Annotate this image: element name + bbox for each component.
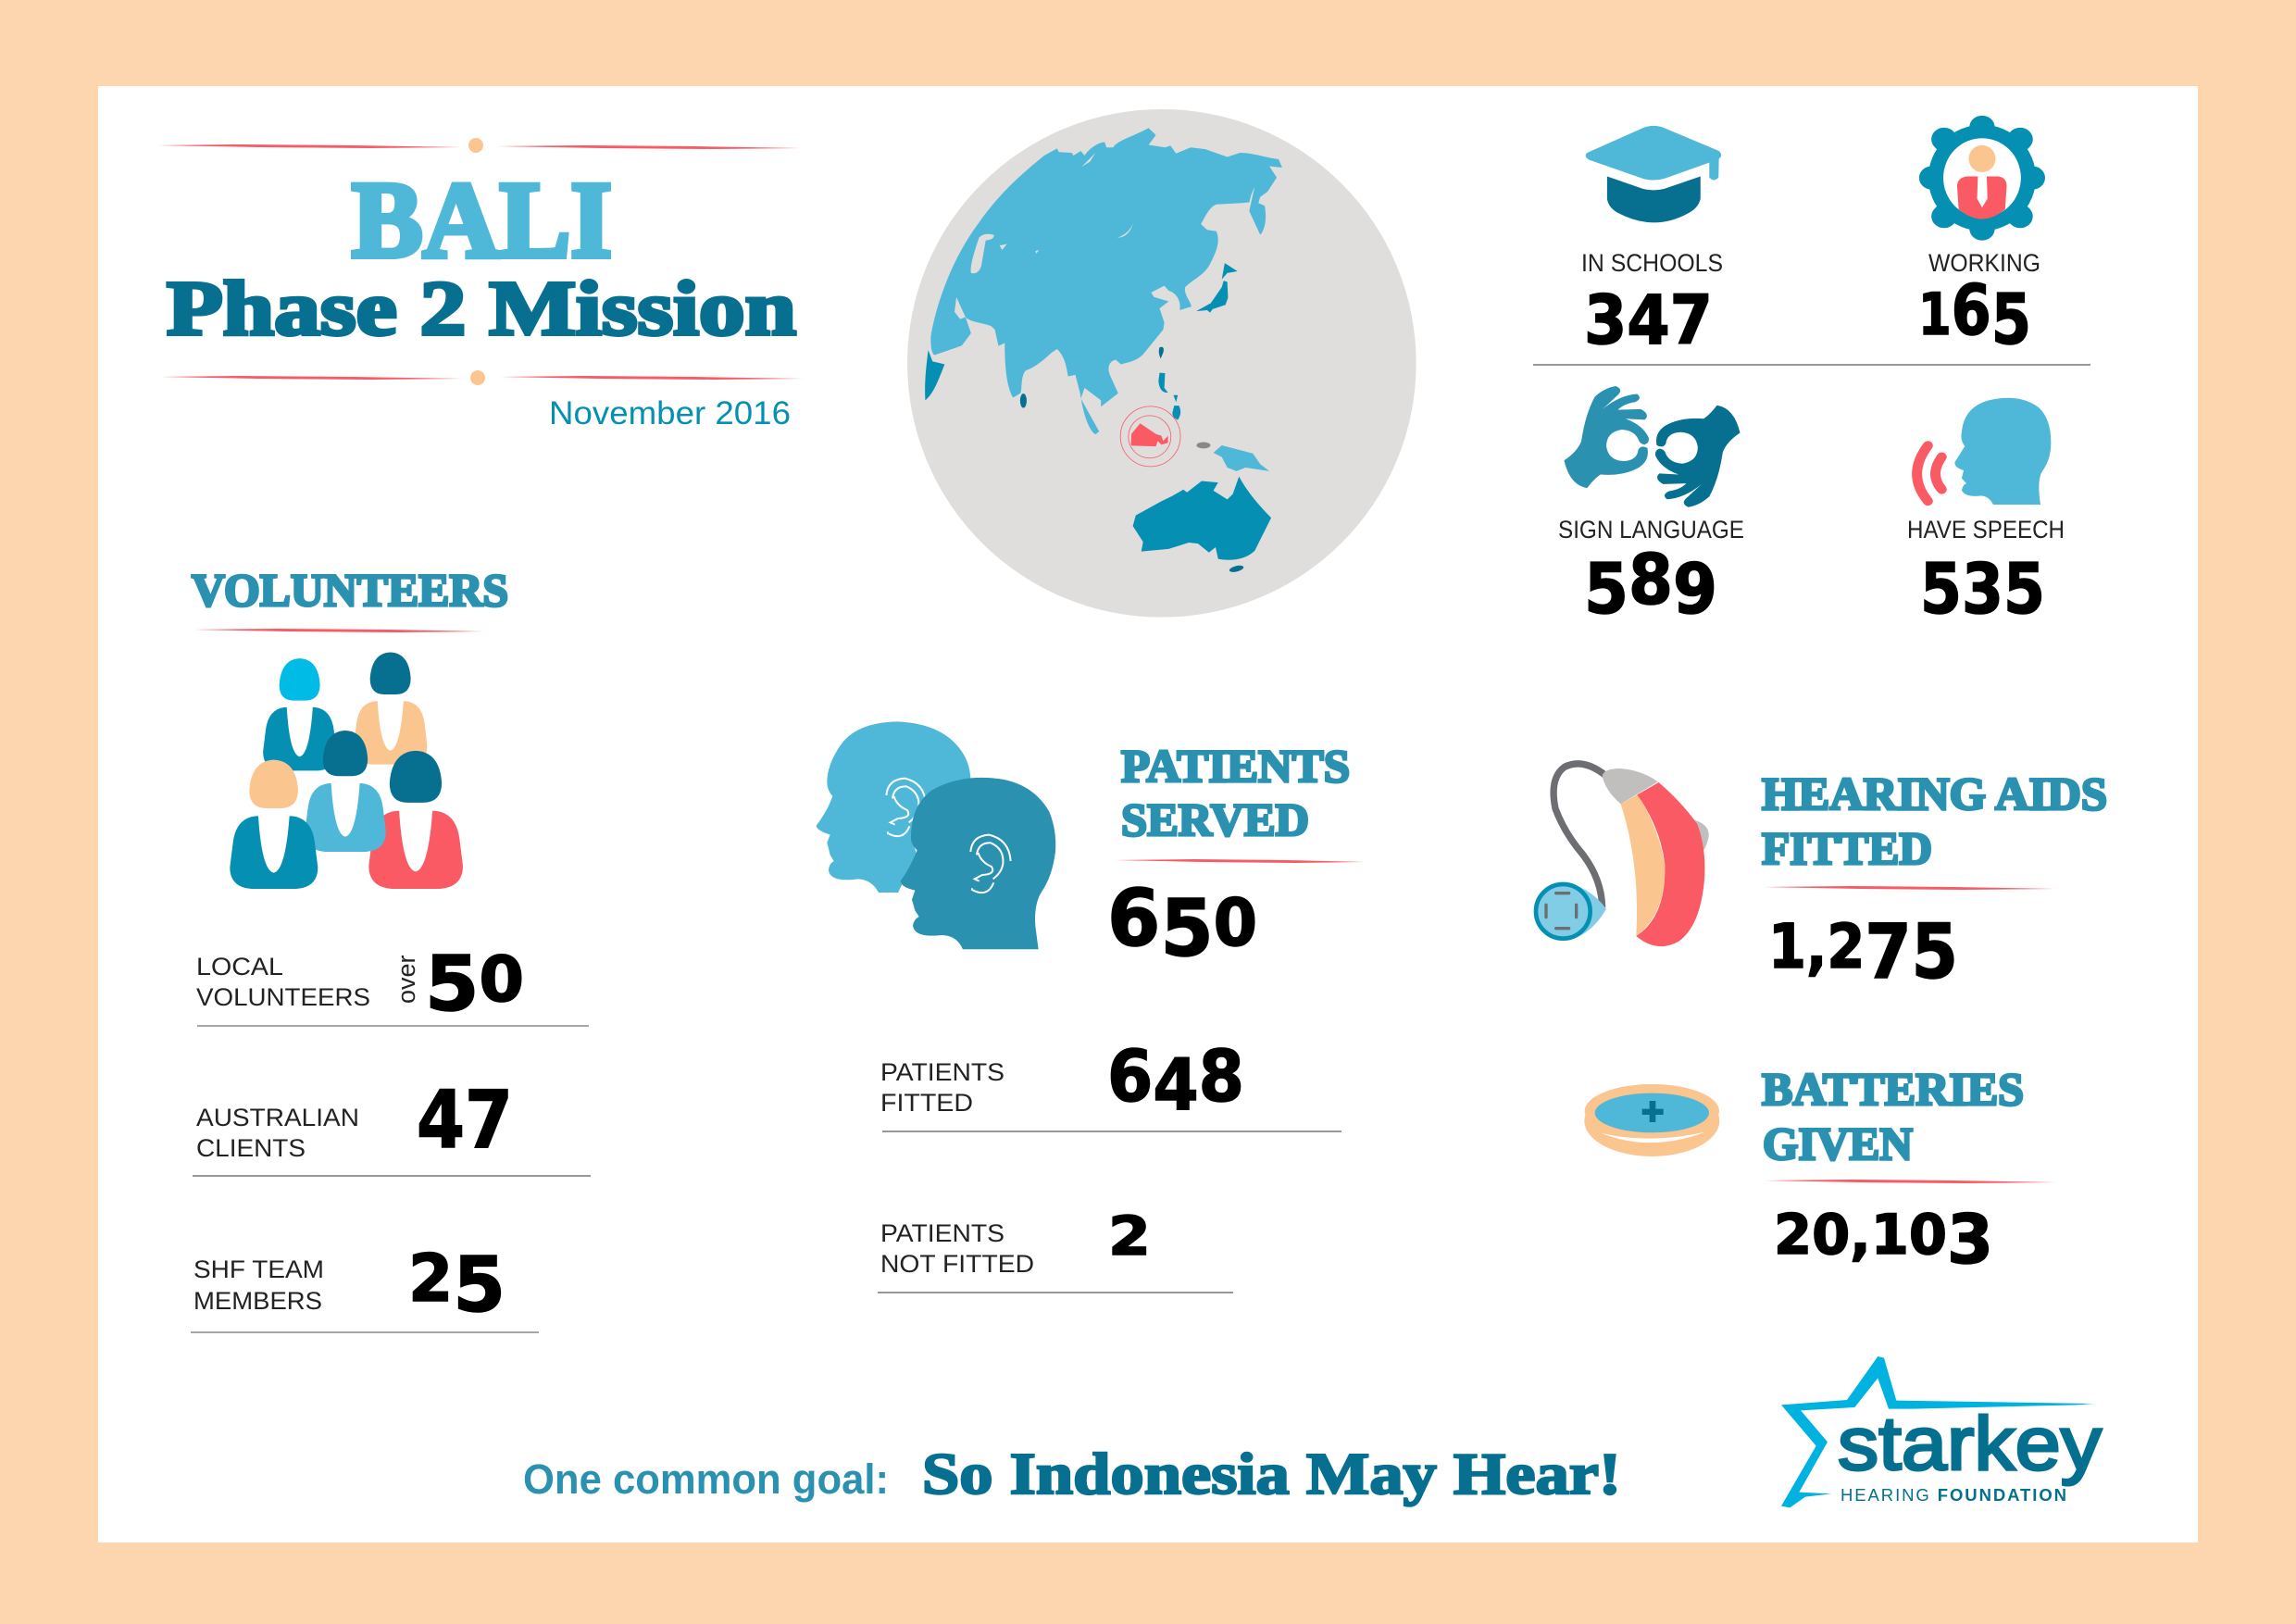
stat: in schools: IN SCHOOLS — [1581, 249, 1723, 277]
stat: working: 5 — [1991, 279, 2031, 360]
stat: SHF team members: SHF TEAM — [193, 1255, 324, 1283]
stat: sign language: 5 — [1584, 548, 1628, 630]
heading: hearing aids fitted: HEARING AIDS — [1762, 768, 2107, 819]
stat: working: WORKING — [1928, 249, 2040, 277]
panel: batteries given — [1762, 1063, 2056, 1280]
panel: hearing aids fitted: FITTED — [1762, 822, 1932, 874]
stat: local volunteers: LOCAL — [196, 953, 283, 981]
number: 650: 6 — [1107, 873, 1160, 965]
stat: have speech: HAVE SPEECH — [1907, 516, 2065, 543]
number: 20,103: 20,10 — [1774, 1203, 1947, 1268]
number: 650: 5 — [1160, 883, 1214, 975]
icon: graduation cap — [1586, 126, 1721, 222]
icon: battery — [1584, 1084, 1719, 1156]
number: 1,275: 75 — [1865, 909, 1958, 996]
stat: patients not fitted: PATIENTS — [880, 1219, 1004, 1247]
stat: have speech: 535 — [1920, 548, 2045, 630]
tagline: So Indonesia May Hear! — [922, 1441, 1621, 1506]
icon: star — [1781, 1356, 2094, 1507]
heading: Phase 2 Mission: Phase 2 Mission — [167, 266, 796, 352]
stat: patients not fitted: NOT FITTED — [880, 1250, 1034, 1278]
stat: sign language: SIGN LANGUAGE — [1558, 516, 1744, 543]
stat: sign language: 9 — [1673, 548, 1717, 630]
stat: local volunteers: 0 — [479, 943, 524, 1017]
stat: local volunteers: over — [393, 955, 420, 1004]
stat: australian clients: CLIENTS — [196, 1134, 306, 1162]
Japan — [1196, 263, 1238, 313]
stat: patients fitted: 6 — [1107, 1036, 1153, 1118]
panel: volunteers — [191, 564, 591, 1332]
stat: working: 6 — [1952, 269, 1991, 351]
stat: sign language: 8 — [1628, 539, 1673, 620]
panel: patients served — [878, 740, 1365, 1293]
Arabia — [925, 350, 944, 400]
number: 20,103: 3 — [1947, 1201, 1993, 1280]
stat: working: 1 — [1918, 281, 1952, 348]
New Guinea — [1214, 445, 1269, 471]
stat: in schools: 347 — [1584, 281, 1713, 360]
date: November 2016 — [549, 395, 791, 431]
stat: patients fitted — [880, 1036, 1244, 1127]
logo: Starkey Hearing Foundation: HEARING FOUNDATION — [1841, 1485, 2066, 1505]
heading: batteries given: BATTERIES — [1762, 1063, 2024, 1115]
stat: patients fitted: FITTED — [880, 1089, 973, 1117]
heading: BALI: BALI — [352, 159, 612, 281]
icon: hearing aid — [1536, 764, 1709, 946]
stat: australian clients: AUSTRALIAN — [196, 1104, 359, 1131]
panel: batteries given: GIVEN — [1763, 1118, 1913, 1169]
stat: patients fitted: 4 — [1153, 1044, 1199, 1127]
stat: patients not fitted — [880, 1205, 1151, 1278]
icon: person in gear — [1928, 125, 2036, 231]
logo: Starkey Hearing Foundation — [1781, 1356, 2102, 1507]
panel: patients served: SERVED — [1121, 793, 1309, 845]
stat: australian clients — [196, 1074, 513, 1167]
stat: patients not fitted: 2 — [1108, 1205, 1151, 1268]
stat: SHF team members — [193, 1241, 505, 1330]
stat: SHF team members: 2 — [408, 1241, 453, 1317]
stat: in schools — [1581, 249, 1723, 360]
stat: local volunteers — [196, 941, 524, 1029]
heading: volunteers: VOLUNTEERS — [192, 564, 508, 616]
stat: have speech — [1907, 516, 2065, 630]
Philippines — [1159, 347, 1164, 358]
stat: SHF team members: MEMBERS — [193, 1287, 322, 1315]
number: 1,275: 1,2 — [1768, 911, 1865, 982]
panel: hearing aids fitted — [1762, 768, 2107, 996]
tagline: One common goal: — [523, 1455, 889, 1503]
logo: Starkey Hearing Foundation: starkey — [1838, 1402, 2102, 1486]
title block — [157, 138, 803, 431]
stat: SHF team members: 5 — [453, 1242, 505, 1330]
stat: working — [1918, 249, 2040, 360]
icon: two heads with ears — [817, 721, 1055, 949]
tagline — [523, 1441, 1621, 1506]
icon: group of people — [230, 652, 463, 889]
stat: sign language — [1558, 516, 1744, 630]
Asia — [930, 128, 1282, 434]
Sri Lanka — [1020, 394, 1027, 407]
icon: speaking head — [1917, 398, 2051, 505]
Australia — [1133, 477, 1271, 560]
Bali highlight — [1120, 406, 1180, 467]
icon: signing hands — [1564, 386, 1740, 507]
stat: australian clients: 47 — [417, 1074, 513, 1167]
stat: local volunteers: VOLUNTEERS — [196, 983, 370, 1011]
stat: patients fitted: 8 — [1199, 1036, 1244, 1118]
heading: patients served: PATIENTS — [1121, 740, 1350, 792]
globe map — [907, 109, 1416, 618]
stat: local volunteers: 5 — [425, 941, 479, 1029]
number: 650: 0 — [1214, 885, 1257, 961]
stat: patients fitted: PATIENTS — [880, 1058, 1004, 1086]
